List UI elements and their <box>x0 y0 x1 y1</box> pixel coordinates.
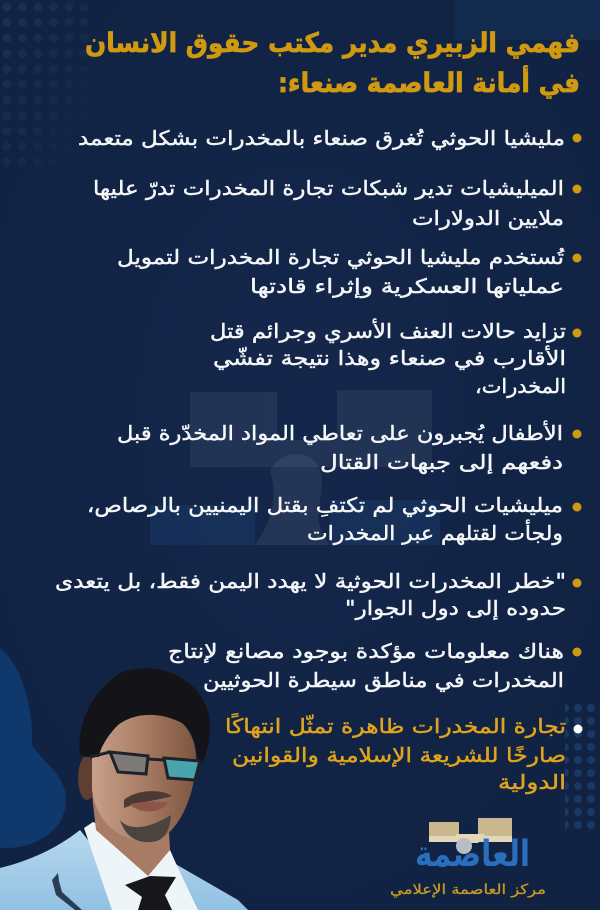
portrait of man <box>0 668 248 910</box>
item 4: تزايد حالات العنف الأسري وجرائم قتل <box>210 319 566 344</box>
item 3 <box>117 245 582 299</box>
shirt <box>84 822 198 910</box>
bullet list <box>55 126 582 794</box>
logo <box>390 818 546 898</box>
hair <box>79 668 210 767</box>
item 2: الميليشيات تدير شبكات تجارة المخدرات تدرّ عليها <box>93 176 564 200</box>
item 6: ولجأت لقتلهم عبر المخدرات <box>307 519 563 545</box>
item 4: المخدرات، <box>475 374 566 398</box>
item 7: "خطر المخدرات الحوثية لا يهدد اليمن فقط، بل يتعدى <box>55 569 566 593</box>
item 9 highlighted <box>225 713 582 794</box>
item 7 <box>55 569 582 621</box>
item 4: الأقارب في صنعاء وهذا نتيجة تفشّي <box>213 346 566 371</box>
item 9 highlighted: الدولية <box>498 770 566 794</box>
item 2: ملايين الدولارات <box>412 206 564 230</box>
title: في أمانة العاصمة صنعاء: <box>278 65 580 99</box>
item 5 <box>117 421 582 475</box>
watermark emblem <box>255 454 330 545</box>
item 9 highlighted: تجارة المخدرات ظاهرة تمثّل انتهاكًا <box>225 713 566 738</box>
item 2 <box>93 176 582 230</box>
mouth <box>130 801 168 811</box>
jacket <box>0 830 248 910</box>
item 6: ميليشيات الحوثي لم تكتفِ بقتل اليمنيين بالرصاص، <box>87 493 563 518</box>
dot pattern: top left <box>0 0 90 170</box>
item 6 <box>87 493 582 545</box>
watermark buildings <box>190 390 432 467</box>
moustache <box>124 791 172 808</box>
blue blob bottom left <box>0 648 66 848</box>
item 5: دفعهم إلى جبهات القتال <box>320 450 563 475</box>
logo emblem <box>456 838 472 854</box>
item 9 highlighted: صارخًا للشريعة الإسلامية والقوانين <box>232 743 566 767</box>
face <box>92 710 196 842</box>
neck <box>92 795 170 876</box>
item 3: عملياتها العسكرية وإثراء قادتها <box>250 274 564 299</box>
lapel shadow <box>52 873 82 910</box>
item 7: حدوده إلى دول الجوار" <box>345 596 566 621</box>
panel: top right tint <box>455 0 600 40</box>
glasses <box>90 752 200 780</box>
logo wordmark: العاصمة <box>415 834 530 875</box>
item 1: مليشيا الحوثي تُغرق صنعاء بالمخدرات بشكل متعمد <box>78 126 565 151</box>
title <box>85 28 580 99</box>
logo buildings <box>429 818 512 843</box>
logo caption: مركز العاصمة الإعلامي <box>390 882 546 898</box>
tie <box>125 876 176 910</box>
item 8: المخدرات في مناطق سيطرة الحوثيين <box>203 668 564 693</box>
dot pattern: bottom right <box>565 703 600 830</box>
item 8 <box>168 639 582 693</box>
beard <box>120 815 171 842</box>
item 8: هناك معلومات مؤكدة بوجود مصانع لإنتاج <box>168 639 564 663</box>
item 5: الأطفال يُجبرون على تعاطي المواد المخدّرة قبل <box>117 421 563 446</box>
watermark logo <box>150 390 440 545</box>
watermark wordmark <box>150 500 440 545</box>
item 3: تُستخدم مليشيا الحوثي تجارة المخدرات لتمويل <box>117 245 564 270</box>
item 4 <box>210 319 582 398</box>
ear <box>78 756 96 800</box>
